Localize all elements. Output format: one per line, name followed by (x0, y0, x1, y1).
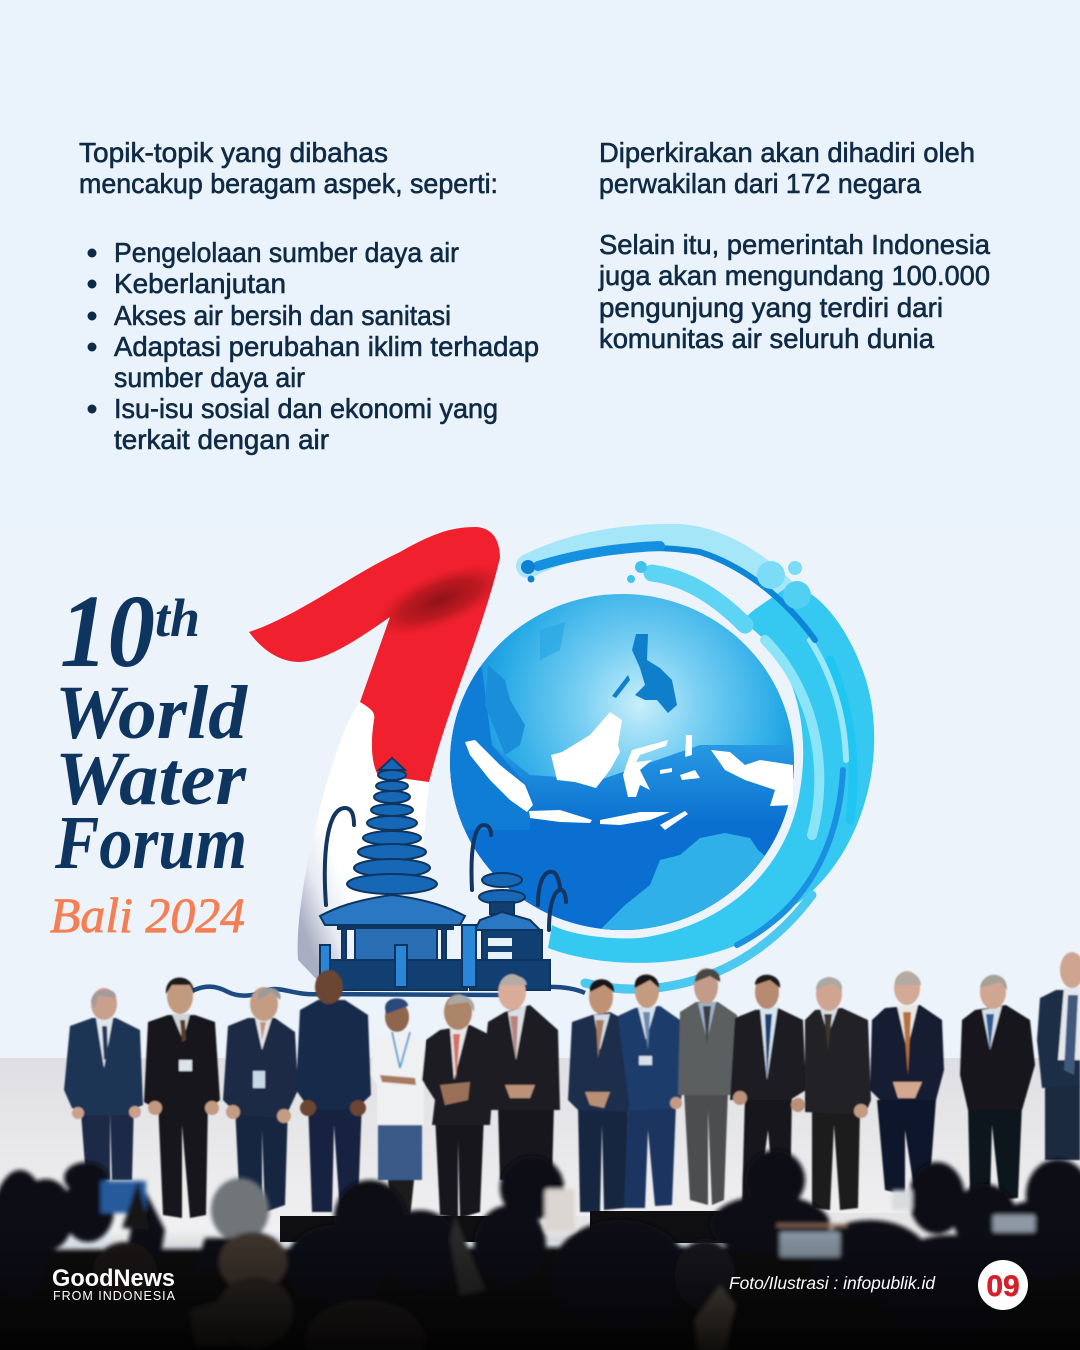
text block: attendance: pengunjung yang terdiri dari (599, 292, 943, 323)
logo wave line (192, 987, 585, 996)
logo temple: main meru (320, 758, 467, 990)
person 8 (568, 979, 636, 1212)
outer bottom ring (585, 895, 812, 989)
phone: blue screen (101, 1181, 146, 1213)
person 13 (870, 971, 944, 1195)
logo water swirl (521, 536, 874, 989)
person 11 (730, 975, 806, 1205)
bullet list of topics: Keberlanjutan (114, 268, 286, 299)
person 6 (422, 994, 495, 1218)
borneo (551, 712, 622, 788)
heading: topics intro (79, 137, 498, 199)
front of stage (110, 1211, 1080, 1245)
bullet list of topics: terkait dengan air (114, 424, 329, 455)
person 3 (223, 987, 298, 1212)
bottom dark gradient (0, 1230, 1080, 1350)
philippines (612, 634, 677, 713)
person 12 (805, 977, 871, 1210)
delegates on stage (64, 952, 1080, 1218)
logo globe (440, 594, 810, 940)
person 1 (64, 988, 143, 1180)
text block: attendance: Selain itu, pemerintah Indonesia (599, 229, 990, 260)
person 7 (484, 974, 560, 1180)
bullet list of topics (88, 237, 539, 455)
flower arrangement (450, 1215, 485, 1295)
heading: topics intro: mencakup beragam aspek, seperti: (79, 168, 498, 199)
heading: topics intro: Topik-topik yang dibahas (79, 137, 388, 168)
logo red ribbon (249, 527, 515, 782)
person 5 (371, 998, 425, 1218)
text block: attendance: juga akan mengundang 100.000 (598, 260, 990, 291)
brand logo: GoodNews from Indonesia: FROM INDONESIA (53, 1289, 176, 1303)
logo white flag ribbon (298, 702, 429, 985)
person 14 (960, 975, 1035, 1200)
stage wall (0, 1058, 1080, 1230)
logo text: 10th World Water Forum Bali 2024: World (55, 671, 248, 755)
sulawesi (623, 740, 668, 797)
papua and moluccas (660, 735, 793, 806)
person 4 (296, 970, 371, 1212)
logo temple: curved penjor poles (325, 808, 566, 930)
bullet list of topics: Akses air bersih dan sanitasi (114, 300, 451, 331)
page number badge (978, 1260, 1028, 1310)
phone: lit screen (545, 1189, 575, 1231)
australia (602, 833, 765, 930)
phone: landscape (780, 1232, 840, 1257)
top light band (528, 536, 810, 620)
main crescent (548, 585, 874, 963)
text block: attendance: Diperkirakan akan dihadiri oleh (599, 137, 975, 168)
stage backdrop screen (0, 527, 1080, 1058)
phone: small (892, 1190, 912, 1210)
brand logo: GoodNews from Indonesia: GoodNews (52, 1265, 175, 1292)
dark strokes (538, 548, 815, 640)
person 9 (618, 974, 686, 1208)
dark crowd base (0, 1245, 1080, 1350)
text block: topics (79, 137, 539, 455)
brand logo: GoodNews from Indonesia (52, 1265, 176, 1303)
deep sea (450, 666, 794, 930)
logo text: 10th World Water Forum Bali 2024: 10 (60, 574, 155, 689)
logo temple: small pagoda (320, 873, 550, 990)
phone: landscape right (993, 1215, 1035, 1232)
mainland asia shading (485, 665, 525, 755)
bullet list of topics: Isu-isu sosial dan ekonomi yang (114, 393, 498, 424)
audience silhouettes (0, 1150, 1080, 1350)
text block: attendance: komunitas air seluruh dunia (599, 323, 934, 354)
logo text: 10th World Water Forum Bali 2024: Water (55, 737, 247, 821)
bullet list of topics: Pengelolaan sumber daya air (114, 237, 459, 268)
logo text: 10th World Water Forum Bali 2024: Bali 2024 (50, 887, 245, 943)
light streaks (765, 640, 819, 835)
text block: attendance: perwakilan dari 172 negara (599, 168, 921, 199)
upper inner cyan stroke (652, 573, 745, 625)
person 10 (678, 968, 737, 1205)
page number badge: 09 (986, 1270, 1020, 1303)
logo text: 10th World Water Forum Bali 2024: Forum (54, 801, 247, 885)
bullet list of topics: Adaptasi perubahan iklim terhadap (114, 331, 539, 362)
person 15 (1037, 952, 1080, 1160)
logo text: 10th World Water Forum Bali 2024: th (155, 588, 200, 648)
bullet list of topics: sumber daya air (114, 362, 305, 393)
page background (0, 0, 1080, 527)
logo text: 10th World Water Forum Bali 2024 (50, 574, 248, 943)
text block: attendance (598, 137, 990, 354)
person 2 (144, 978, 220, 1218)
photo credit: Foto/Ilustrasi : infopublik.id (729, 1273, 936, 1293)
java and lesser sunda islands (529, 810, 688, 830)
photo panel: stage with logo and delegates (0, 527, 1080, 1350)
sumatra (465, 740, 533, 812)
